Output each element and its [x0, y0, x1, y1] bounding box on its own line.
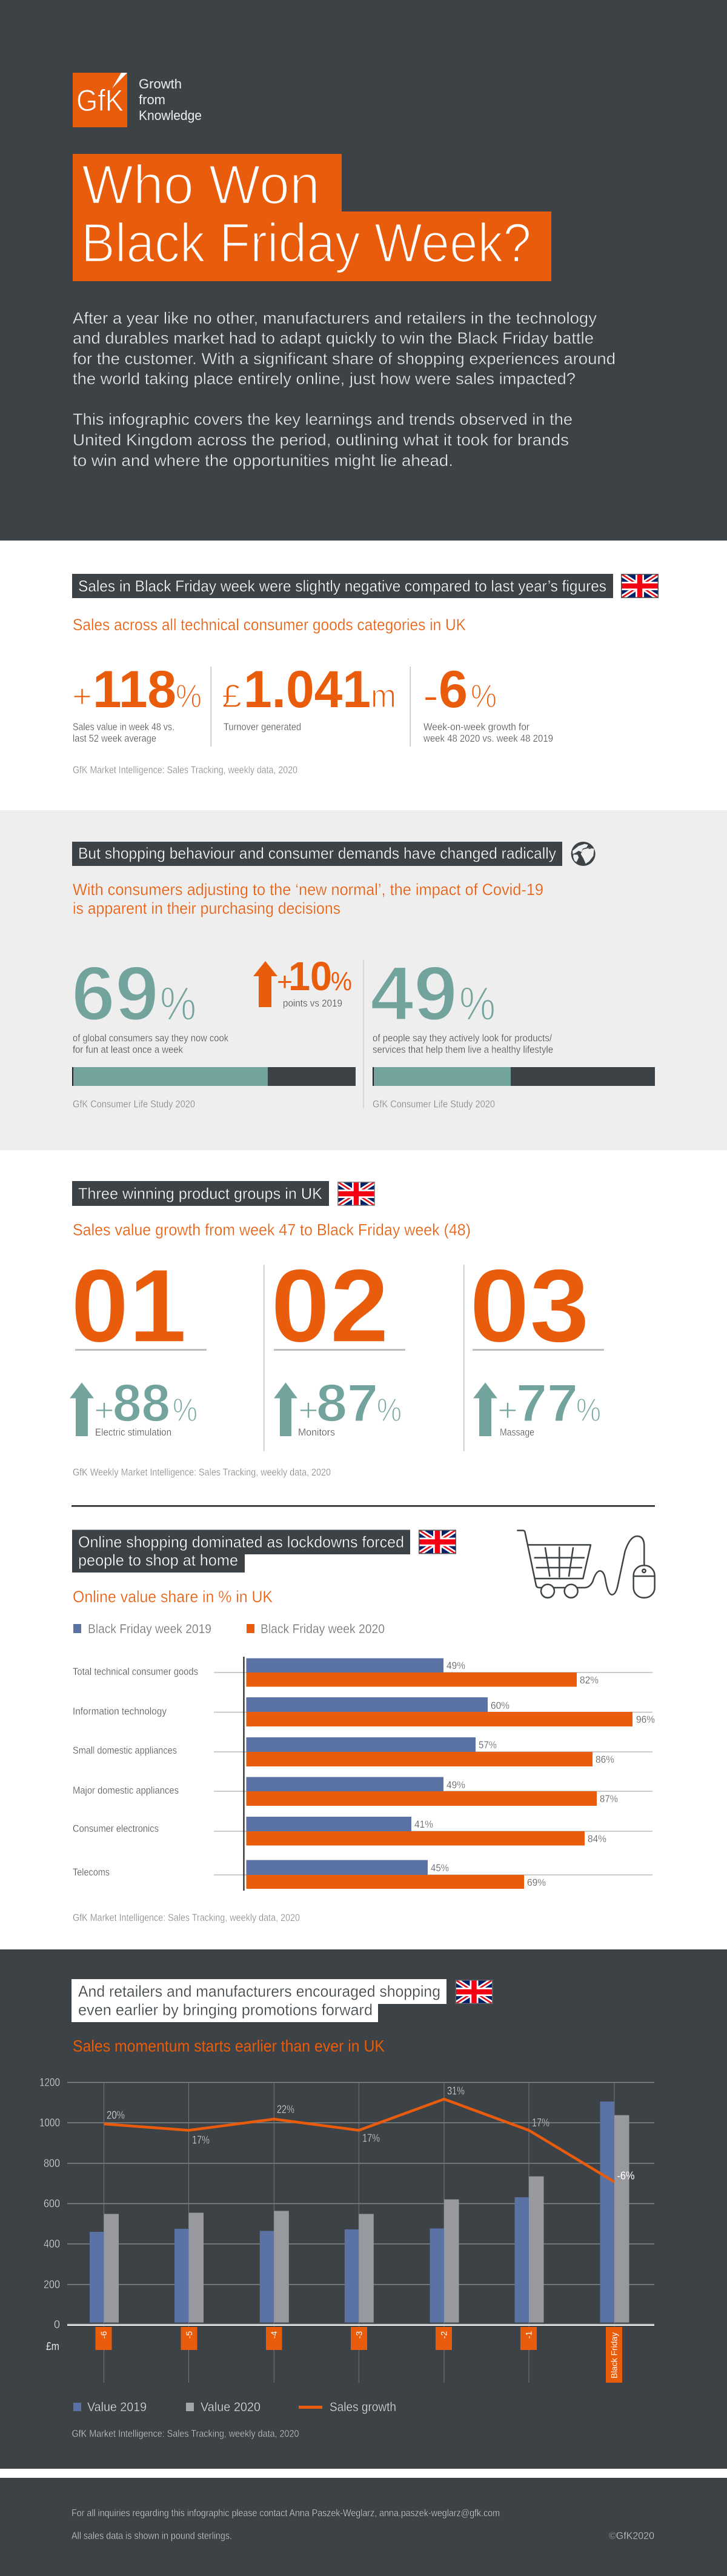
callout: +10 points vs 2019: % [331, 967, 352, 996]
stat: £1.041m: £ [222, 678, 242, 714]
legend: Value 2020 [201, 2400, 261, 2414]
intro text block: to win and where the opportunities might lie ahead. [73, 451, 453, 470]
row: information technology: 60% [491, 1700, 510, 1711]
title: Black Friday Week? [81, 213, 531, 274]
combo chart: weekly value and sales growth: -4 [269, 2331, 279, 2338]
row: major domestic appliances: Major domestic appliances [73, 1785, 179, 1796]
y axis labels: 1200 [39, 2076, 60, 2088]
source note: GfK Market Intelligence: Sales Tracking, weekly data, 2020 [73, 1912, 300, 1923]
stat: -6%: Week-on-week growth for [423, 721, 529, 733]
y axis labels: 800 [44, 2157, 60, 2169]
panel: three winning product groups [70, 1181, 655, 1506]
growth labels [107, 2085, 635, 2182]
callout: +10 points vs 2019 [253, 954, 352, 1009]
row: small domestic appliances [73, 1737, 614, 1766]
copyright: ©GfK2020 [609, 2530, 654, 2541]
stat: +118%: % [176, 678, 202, 714]
stat: -6%: - [423, 678, 438, 714]
rank 02: monitors: 02 [271, 1248, 389, 1364]
heading: Sales in Black Friday week were slightly negative compared to last year’s figures [78, 577, 606, 595]
heading: But shopping behaviour and consumer demands have changed radically [78, 844, 556, 862]
icon: UK flag [419, 1529, 456, 1554]
stat: 69%: of global consumers say they now cook [73, 1033, 228, 1043]
row: information technology [73, 1697, 655, 1726]
rank 02: monitors: + [298, 1392, 319, 1428]
y axis labels [39, 2076, 60, 2352]
rank 03: massage: 03 [470, 1248, 589, 1364]
growth labels: 17% [532, 2117, 549, 2129]
row: major domestic appliances [73, 1777, 618, 1806]
combo chart: weekly value and sales growth: -6 [99, 2331, 108, 2338]
legend [73, 2400, 396, 2414]
row: telecoms: Telecoms [73, 1866, 110, 1878]
subheading: Online value share in % in UK [73, 1588, 273, 1606]
rank 01: electric stimulation [70, 1248, 207, 1438]
intro text block: and durables market had to adapt quickly to win the Black Friday battle [73, 329, 594, 347]
stat: 69%: for fun at least once a week [73, 1043, 183, 1056]
row: consumer electronics: 84% [588, 1833, 606, 1845]
panel: intro header [0, 0, 727, 541]
stat: 69%: 69 [71, 950, 159, 1036]
subheading: is apparent in their purchasing decisions [73, 899, 340, 917]
row: telecoms [73, 1860, 546, 1889]
rank 02: monitors: % [377, 1392, 402, 1428]
line: sales growth [104, 2099, 614, 2182]
y axis labels: 1000 [39, 2117, 60, 2129]
row: major domestic appliances: 87% [600, 1793, 618, 1805]
stat: £1.041m [222, 661, 396, 733]
callout: +10 points vs 2019: points vs 2019 [283, 997, 342, 1009]
row: major domestic appliances: 49% [446, 1779, 465, 1791]
arrow: up teal [274, 1383, 297, 1436]
bars: value 2020 [104, 2115, 629, 2323]
heading [71, 1979, 446, 2022]
row: total technical consumer goods [73, 1658, 599, 1687]
bars: value 2019 [90, 2102, 614, 2323]
subheading: Sales across all technical consumer goods categories in UK [73, 616, 466, 634]
panel: online shopping [72, 1529, 655, 1923]
stat: 49%: % [459, 977, 496, 1030]
stat: 69%: % [160, 977, 196, 1030]
stat: £1.041m: Turnover generated [224, 721, 301, 733]
icon: UK flag [337, 1182, 375, 1206]
logo: GfK growth from knowledge [73, 73, 202, 127]
stat: 49%: 49 [370, 950, 457, 1036]
growth labels: 31% [447, 2085, 465, 2097]
rank 02: monitors: Monitors [298, 1426, 335, 1438]
rank 01: electric stimulation: 88 [113, 1374, 170, 1433]
growth labels: 17% [192, 2134, 210, 2146]
y axis labels: 400 [44, 2238, 60, 2250]
stat: -6%: 6 [439, 661, 468, 719]
legend: Black Friday week 2020 [261, 1622, 385, 1636]
row: consumer electronics [73, 1817, 606, 1846]
intro text block: United Kingdom across the period, outlining what it took for brands [73, 431, 569, 449]
rank 03: massage: Massage [500, 1426, 534, 1438]
rank 02: monitors: 87 [316, 1374, 378, 1433]
intro text block: for the customer. With a significant share of shopping experiences around [73, 350, 616, 368]
row: total technical consumer goods: 49% [446, 1660, 465, 1671]
currency note: All sales data is shown in pound sterlings. [71, 2530, 232, 2541]
stat: 49%: of people say they actively look for products/ [373, 1033, 552, 1043]
row: information technology: Information technology [73, 1705, 167, 1717]
arrow: up orange [253, 961, 277, 1007]
panel: sales momentum [0, 1949, 727, 2469]
heading: And retailers and manufacturers encouraged shopping [78, 1982, 440, 2000]
rank 02: monitors [271, 1248, 405, 1438]
heading: Online shopping dominated as lockdowns forced [78, 1533, 404, 1551]
heading: even earlier by bringing promotions forward [78, 2001, 373, 2019]
row: consumer electronics: Consumer electronics [73, 1823, 159, 1834]
stat: -6%: week 48 2020 vs. week 48 2019 [423, 733, 553, 744]
heading [72, 1529, 410, 1573]
intro text block: After a year like no other, manufacturers and retailers in the technology [73, 309, 597, 327]
icon: shopping cart with mouse [517, 1531, 655, 1598]
row: telecoms: 45% [431, 1862, 449, 1874]
bar chart: online share [73, 1657, 655, 1891]
heading: people to shop at home [78, 1551, 238, 1569]
legend: Value 2019 [87, 2400, 147, 2414]
rank 01: electric stimulation: % [173, 1392, 198, 1428]
arrow: up teal [70, 1383, 94, 1436]
progress bar: 49% [373, 1067, 655, 1086]
legend: Sales growth [330, 2400, 396, 2414]
combo chart: weekly value and sales growth: -1 [523, 2331, 533, 2338]
rank 03: massage [470, 1248, 604, 1438]
week tags [96, 2327, 622, 2383]
legend: Black Friday week 2019 [88, 1622, 211, 1636]
row: total technical consumer goods: Total technical consumer goods [73, 1666, 198, 1677]
panel: footer [0, 2478, 727, 2576]
rank 03: massage: + [497, 1392, 518, 1428]
heading: Three winning product groups in UK [78, 1184, 323, 1202]
combo chart: weekly value and sales growth: -5 [184, 2331, 194, 2338]
icon: UK flag [621, 574, 659, 598]
stat: -6%: % [471, 678, 497, 714]
arrow: up teal [473, 1383, 497, 1436]
callout: +10 points vs 2019: + [277, 967, 293, 996]
icon: globe [571, 842, 596, 866]
rank 01: electric stimulation: Electric stimulation [95, 1426, 171, 1438]
stat: +118%: Sales value in week 48 vs. [73, 721, 174, 733]
logo: GfK growth from knowledge: Knowledge [139, 108, 202, 123]
intro text block: This infographic covers the key learnings and trends observed in the [73, 410, 573, 428]
combo chart: weekly value and sales growth: -2 [439, 2331, 448, 2338]
stat: -6% [423, 661, 553, 744]
legend [73, 1622, 385, 1636]
row: telecoms: 69% [527, 1877, 546, 1888]
growth labels: 17% [362, 2132, 380, 2144]
subheading: Sales momentum starts earlier than ever in UK [73, 2037, 385, 2055]
row: consumer electronics: 41% [414, 1819, 433, 1830]
contact text: For all inquiries regarding this infographic please contact Anna Paszek-Weglarz, anna.paszek-weglarz@gfk.com [71, 2508, 500, 2518]
logo: GfK growth from knowledge: Growth [139, 76, 182, 92]
stat: 49%: services that help them live a healthy lifestyle [373, 1043, 553, 1056]
source note: GfK Market Intelligence: Sales Tracking, weekly data, 2020 [71, 2428, 299, 2440]
source note: GfK Consumer Life Study 2020 [73, 1098, 195, 1110]
source note: GfK Consumer Life Study 2020 [373, 1098, 495, 1110]
stat: £1.041m: 1.041 [244, 661, 371, 719]
combo chart: weekly value and sales growth [39, 2076, 654, 2383]
rank 03: massage: % [576, 1392, 601, 1428]
stat: +118% [72, 661, 202, 744]
logo: GfK growth from knowledge: GfK [76, 84, 124, 118]
combo chart: weekly value and sales growth: -3 [354, 2331, 364, 2338]
logo: GfK growth from knowledge: from [139, 92, 165, 107]
stat: £1.041m: m [371, 678, 396, 714]
growth labels: 22% [277, 2103, 294, 2115]
stat: +118%: + [72, 678, 92, 714]
rank 03: massage: 77 [516, 1374, 578, 1433]
source note: GfK Weekly Market Intelligence: Sales Tracking, weekly data, 2020 [73, 1466, 331, 1478]
row: small domestic appliances: Small domestic appliances [73, 1745, 177, 1756]
intro text block: the world taking place entirely online, just how were sales impacted? [73, 370, 576, 388]
row: information technology: 96% [636, 1714, 655, 1725]
subheading: With consumers adjusting to the ‘new normal’, the impact of Covid-19 [73, 880, 543, 899]
title: Who Won [82, 155, 320, 216]
combo chart: weekly value and sales growth: Black Friday [609, 2332, 619, 2378]
stat: 49% [370, 950, 553, 1056]
row: small domestic appliances: 57% [479, 1739, 497, 1751]
stat: 69% [71, 950, 228, 1056]
y axis labels: £m [46, 2340, 59, 2352]
panel: sales in Black Friday week [0, 541, 727, 810]
callout: +10 points vs 2019: 10 [288, 954, 332, 999]
y axis labels: 0 [54, 2318, 60, 2331]
growth labels: 20% [107, 2109, 125, 2121]
stat: +118%: last 52 week average [73, 733, 156, 744]
stat: +118%: 118 [93, 661, 176, 719]
row: small domestic appliances: 86% [596, 1754, 614, 1765]
intro text block [73, 309, 616, 470]
subheading: Sales value growth from week 47 to Black Friday week (48) [73, 1220, 471, 1239]
title [73, 154, 551, 281]
subheading [73, 880, 543, 917]
row: total technical consumer goods: 82% [580, 1674, 599, 1686]
source note: GfK Market Intelligence: Sales Tracking, weekly data, 2020 [73, 764, 297, 776]
y axis labels: 200 [44, 2278, 60, 2291]
y axis labels: 600 [44, 2197, 60, 2209]
rank 01: electric stimulation: 01 [71, 1248, 187, 1364]
rank 01: electric stimulation: + [94, 1392, 115, 1428]
panel: shopping behaviour [0, 810, 727, 1150]
icon: UK flag [456, 1980, 493, 2004]
progress bar: 69% [72, 1067, 356, 1086]
growth labels: -6% [617, 2169, 635, 2182]
